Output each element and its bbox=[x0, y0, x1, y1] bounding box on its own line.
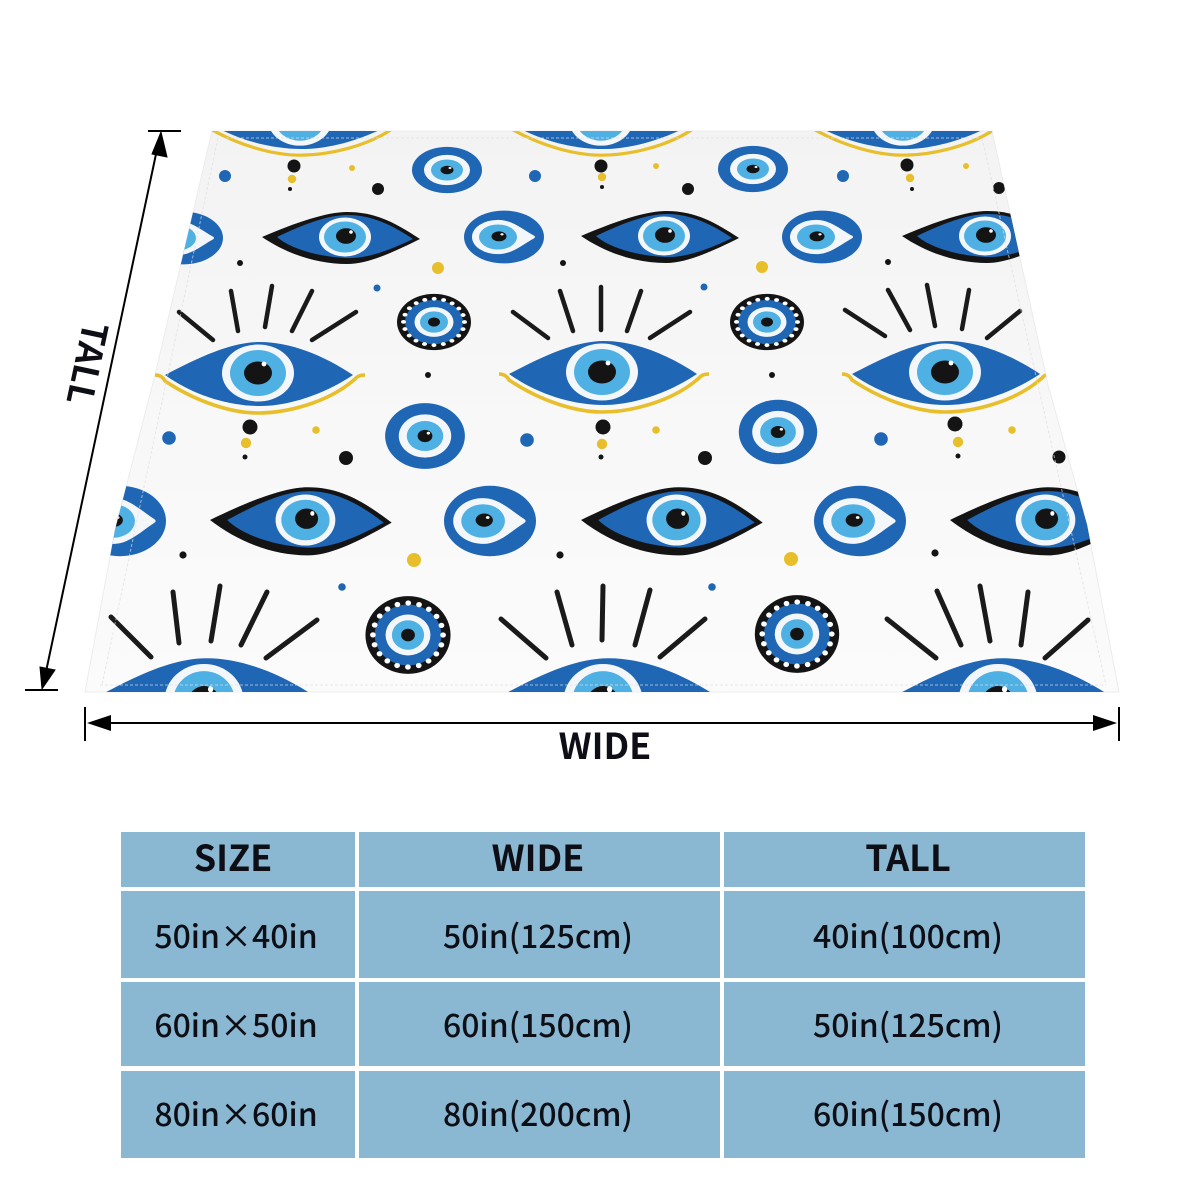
row 3 dots bbox=[162, 372, 1065, 465]
row 60x50: 50in(125cm) bbox=[813, 1001, 1003, 1047]
header row: SIZE bbox=[194, 830, 272, 882]
row 80x60: 80in×60in bbox=[154, 1090, 318, 1136]
row 3 gold eyes bbox=[155, 341, 1052, 413]
row 4 teardrop charms bbox=[74, 486, 906, 556]
row 80x60: 80in(200cm) bbox=[443, 1090, 633, 1136]
row 3 round charms bbox=[385, 400, 817, 469]
row 80x60 bbox=[121, 1071, 1085, 1158]
row 60x50 bbox=[121, 982, 1085, 1066]
row 60x50: 60in×50in bbox=[154, 1001, 318, 1047]
row 4 outlined eyes bbox=[210, 487, 1132, 555]
row 5 partial eyes bbox=[106, 658, 1104, 692]
row 2 outlined eyes bbox=[262, 211, 1060, 264]
tall label: TALL bbox=[56, 318, 123, 410]
row 50x40: 50in×40in bbox=[154, 912, 318, 958]
row 5 dotted charms bbox=[365, 595, 839, 674]
row 1 dots bbox=[219, 158, 1005, 195]
row 1 partial gold eyes bbox=[212, 131, 992, 157]
row 4 dots bbox=[179, 549, 939, 591]
row 1 round charms bbox=[412, 146, 788, 193]
header row bbox=[121, 830, 1085, 887]
blanket panel bbox=[84, 130, 1120, 692]
row 5 eyelashes bbox=[111, 586, 1088, 658]
wide dimension arrow bbox=[85, 707, 1119, 741]
header row: WIDE bbox=[492, 830, 584, 882]
row 60x50: 60in(150cm) bbox=[443, 1001, 633, 1047]
row 3 dotted charms bbox=[397, 294, 804, 350]
row 2 teardrop charms bbox=[143, 211, 862, 264]
row 50x40 bbox=[121, 891, 1085, 978]
tall dimension arrow bbox=[25, 131, 181, 690]
blanket fabric bbox=[85, 131, 1119, 692]
row 80x60: 60in(150cm) bbox=[813, 1090, 1003, 1136]
wide label: WIDE bbox=[559, 718, 651, 770]
row 2 dots bbox=[237, 259, 891, 292]
row 50x40: 40in(100cm) bbox=[813, 912, 1003, 958]
header row: TALL bbox=[865, 830, 951, 882]
size table bbox=[121, 830, 1085, 1158]
blanket pattern bbox=[100, 131, 1106, 692]
row 50x40: 50in(125cm) bbox=[443, 912, 633, 958]
row 3 eyelashes bbox=[179, 285, 1020, 340]
